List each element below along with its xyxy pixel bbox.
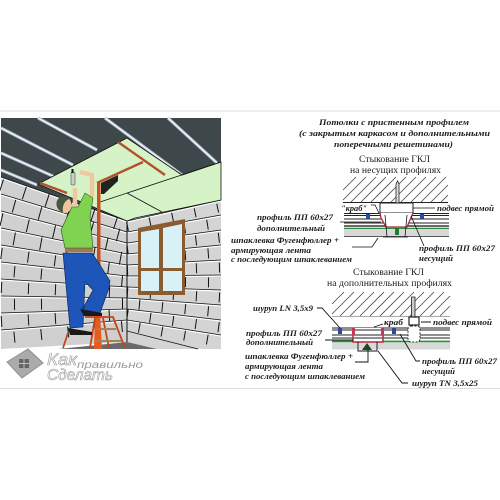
labels: несущий (419, 253, 453, 263)
hanger (380, 203, 413, 213)
gypsum board ceiling panels (38, 138, 221, 221)
inner layer lines (354, 330, 382, 338)
shoes (68, 309, 102, 335)
diagram: joint on load-bearing profiles (231, 177, 496, 264)
heading: поперечными решетинами) (334, 139, 453, 149)
logo text: Сделать (47, 367, 113, 384)
anchor (396, 181, 399, 204)
subheading: joint on load-bearing profiles: на несущих профилях (350, 165, 441, 176)
labels: профиль ПП 60х27 (257, 212, 334, 222)
blue profiles (366, 214, 424, 219)
joint filler (362, 343, 372, 350)
heading: (с закрытым каркасом и дополнительными (299, 128, 490, 138)
ceiling slab (1, 118, 221, 222)
labels: подвес прямой (433, 317, 492, 327)
worker (56, 169, 110, 335)
logo text: правильно (77, 360, 144, 371)
labels: с последующим шпаклеванием (245, 371, 365, 381)
window (138, 219, 185, 295)
blue profiles (338, 328, 396, 334)
logo text (47, 350, 144, 384)
hanger (409, 317, 419, 325)
trousers (63, 253, 110, 328)
floor (58, 342, 157, 349)
orange telescopic prop (94, 183, 102, 349)
labels: армирующая лента (245, 361, 324, 371)
hatched slab (332, 292, 450, 316)
leader lines (317, 308, 431, 383)
black support bracket (101, 175, 118, 194)
ladder (63, 317, 125, 348)
dotted hanger base (408, 326, 420, 342)
arms (75, 172, 92, 207)
leader lines (340, 205, 435, 247)
labels: шуруп TN 3,5х25 (412, 378, 479, 388)
labels: шпаклевка Фугенфюллер + (231, 235, 339, 245)
labels: несущий (422, 366, 455, 376)
subheading: joint on additional profiles: Стыкование ГКЛ (353, 268, 425, 278)
head (58, 197, 72, 213)
labels: профиль ПП 60х27 (419, 243, 496, 253)
red U profile (353, 328, 383, 342)
subheading: joint on additional profiles: на дополнительных профилях (327, 278, 452, 289)
belt (65, 248, 93, 252)
labels: с последующим шпаклеванием (231, 254, 352, 264)
labels: шуруп LN 3,5х9 (253, 303, 314, 313)
hair (56, 196, 69, 212)
labels: краб (384, 317, 404, 327)
back brick wall (127, 200, 221, 349)
logo text: Как (47, 350, 78, 369)
labels: армирующая лента (231, 245, 312, 255)
labels: "краб" (341, 203, 367, 213)
labels: подвес прямой (437, 203, 494, 213)
labels (245, 303, 498, 388)
red profile ends (352, 328, 384, 335)
logo diamond icon (7, 349, 43, 378)
ceiling profiles (1, 118, 217, 185)
logo (7, 349, 144, 384)
shirt (61, 193, 93, 248)
heading: Потолки с пристенным профилем (318, 117, 469, 127)
labels: профиль ПП 60х27 (422, 356, 498, 366)
labels: профиль ПП 60х27 (246, 328, 323, 338)
diagram: joint on additional profiles (245, 292, 498, 388)
layers (332, 328, 450, 350)
labels (231, 203, 496, 264)
subheading: joint on load-bearing profiles: Стыкование ГКЛ (359, 155, 431, 165)
drill (71, 169, 75, 185)
labels: дополнительный (257, 223, 325, 233)
red ceiling profile T-frame (40, 142, 165, 193)
subheading: joint on additional profiles (327, 268, 452, 289)
joint filler (395, 228, 399, 235)
hatched slab (343, 177, 448, 202)
red U profile (380, 213, 413, 227)
left brick wall (1, 177, 127, 349)
subheading: joint on load-bearing profiles (350, 155, 441, 176)
anchor (412, 297, 415, 317)
panel: ceiling installation illustration (1, 118, 221, 349)
heading (299, 117, 490, 149)
layers (344, 214, 449, 236)
labels: дополнительный (246, 337, 313, 347)
labels: шпаклевка Фугенфюллер + (245, 351, 353, 361)
